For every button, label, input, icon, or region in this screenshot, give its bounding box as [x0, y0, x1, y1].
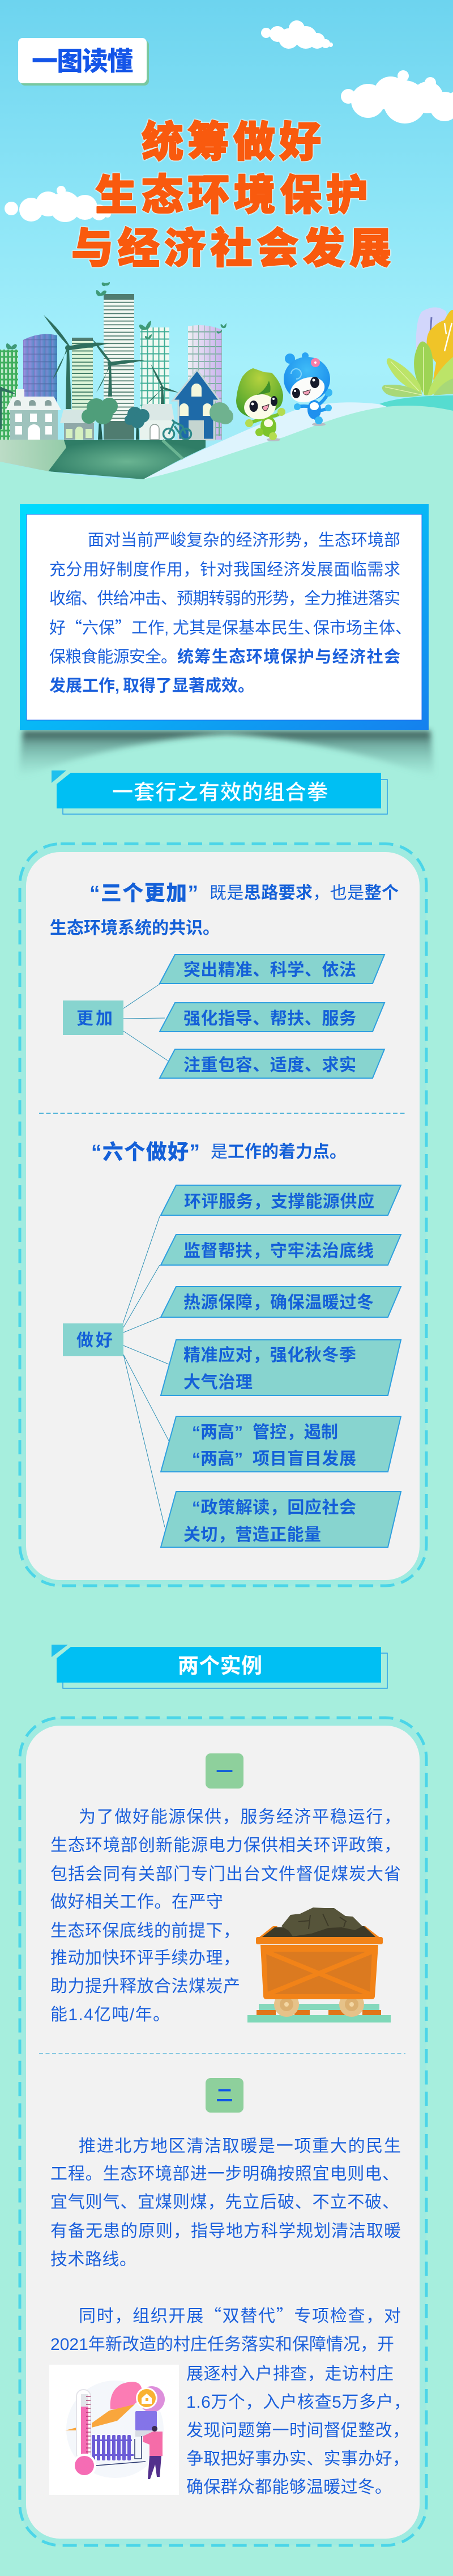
intro text — [49, 531, 412, 695]
intro text: 发展工作, — [49, 676, 119, 695]
intro text: 好“六保”工作, — [49, 615, 169, 638]
example two text: 展逐村入户排查，走访村庄 — [186, 2365, 394, 2383]
diagram: 做好: “两高” — [192, 1423, 243, 1442]
example one text: 生态环境部创新能源电力保供相关环评政策， — [50, 1836, 401, 1855]
六个做好 intro: 是工作的着力点。 — [211, 1143, 347, 1161]
diagram: 做好: 大气治理 — [183, 1373, 253, 1392]
diagram: 做好: 热源保障，确保温暖过冬 — [183, 1293, 374, 1312]
example two text: 争取把好事办实、实事办好， — [186, 2450, 409, 2468]
cloud: top right — [341, 70, 453, 124]
example two text: 确保群众都能够温暖过冬。 — [186, 2478, 392, 2497]
example one text — [50, 1808, 401, 2024]
diagram: 更加: 注重包容、适度、求实 — [183, 1056, 356, 1075]
butterflies — [6, 282, 226, 349]
example one text: 生态环保底线的前提下， — [50, 1922, 240, 1940]
intro text: 面对当前严峻复杂的经济形势，生态环境部 — [88, 531, 400, 550]
diagram: 做好 — [63, 1185, 401, 1547]
tag: 一 — [206, 1753, 243, 1789]
badge: 一图读懂: 一图读懂 — [32, 46, 133, 76]
cloud: top centre — [261, 20, 333, 49]
diagram: 做好: 关切，营造正能量 — [183, 1526, 321, 1544]
diagram: 更加: 突出精准、科学、依法 — [183, 961, 356, 980]
heading: 两个实例 — [52, 1645, 387, 1688]
example one text: 能1.4亿吨/年。 — [50, 2006, 170, 2024]
diagram: 做好: 管控，遏制 — [253, 1423, 338, 1442]
icon: heating and thermometer — [49, 2365, 179, 2495]
icon: coal mine cart — [247, 1907, 391, 2023]
diagram: 做好: 精准应对，强化秋冬季 — [183, 1346, 356, 1365]
diagram: 更加: 强化指导、帮扶、服务 — [183, 1010, 356, 1028]
heading: 一套行之有效的组合拳 — [52, 770, 387, 814]
六个做好 intro — [91, 1140, 347, 1164]
example two text: 有备无患的原则，指导地方科学规划清洁取暖 — [50, 2222, 401, 2241]
example one text: 推动加快环评手续办理， — [50, 1949, 240, 1968]
title: 与经济社会发展 — [71, 225, 391, 272]
example two text: 同时，组织开展“双替代”专项检查，对 — [79, 2302, 401, 2327]
intro text: 取得了显著成效。 — [123, 676, 254, 695]
panel: examples — [20, 1718, 426, 2545]
diagram: 做好: 做好 — [76, 1331, 113, 1350]
heading: 一套行之有效的组合拳: 一套行之有效的组合拳 — [112, 781, 328, 804]
tag: 二 — [206, 2078, 243, 2113]
diagram: 做好: 环评服务，支撑能源供应 — [184, 1193, 374, 1211]
intro text: 收缩、供给冲击、预期转弱的形势，全力推进落实 — [49, 589, 400, 608]
ground and hills — [0, 395, 453, 487]
mascot: green — [236, 368, 285, 441]
diagram: 做好: 项目盲目发展 — [253, 1450, 356, 1468]
三个更加 intro — [50, 882, 399, 938]
panel: intro — [18, 504, 435, 779]
houses — [6, 370, 220, 440]
diagram: 更加: 更加 — [76, 1010, 113, 1028]
intro text: 保粮食能源安全。 — [49, 648, 177, 666]
diagram: 做好: “政策解读，回应社会 — [192, 1498, 356, 1517]
三个更加 intro: 既是思路要求，也是整个 — [210, 884, 399, 902]
mascot: blue — [284, 352, 332, 426]
trees — [82, 398, 233, 440]
example one text: 做好相关工作。在严守 — [50, 1893, 223, 1911]
diagram: 做好: 监督帮扶，守牢法治底线 — [183, 1242, 374, 1261]
intro text: 保市场主体、 — [313, 619, 412, 637]
hero illustration — [0, 0, 453, 487]
三个更加 intro: 生态环境系统的共识。 — [50, 919, 220, 938]
title — [71, 118, 391, 272]
bicycle — [163, 420, 191, 440]
city: buildings — [0, 294, 222, 440]
example two text: 1.6万个，入户核查5万多户， — [186, 2393, 411, 2412]
六个做好 intro: “六个做好” — [91, 1140, 200, 1164]
example two text: 宜气则气、宜煤则煤，先立后破、不立不破、 — [50, 2193, 399, 2212]
diagram: 更加 — [63, 955, 384, 1078]
三个更加 intro: “三个更加” — [89, 882, 198, 905]
example two text: 技术路线。 — [50, 2250, 136, 2269]
example two text: 2021年新改造的村庄任务落实和保障情况，开 — [50, 2335, 394, 2354]
tag: 一: 一 — [216, 1763, 233, 1782]
example one text: 为了做好能源保供，服务经济平稳运行， — [79, 1808, 401, 1826]
diagram: 做好: “两高” — [192, 1450, 243, 1468]
panel: combination — [20, 844, 426, 1586]
intro text: 充分用好制度作用，针对我国经济发展面临需求 — [49, 560, 400, 579]
heading: 两个实例: 两个实例 — [178, 1654, 262, 1677]
cloud: left — [5, 186, 111, 222]
badge: 一图读懂 — [18, 38, 149, 86]
example one text: 包括会同有关部门专门出台文件督促煤炭大省 — [50, 1865, 401, 1884]
example two text — [50, 2137, 411, 2497]
tag: 二: 二 — [216, 2087, 233, 2105]
intro text: 统筹生态环境保护与经济社会 — [177, 648, 400, 666]
intro text: 尤其是保基本民生、 — [173, 619, 320, 637]
example two text: 发现问题第一时间督促整改， — [186, 2421, 409, 2440]
example one text: 助力提升释放合法煤炭产 — [50, 1977, 240, 1996]
example two text: 推进北方地区清洁取暖是一项重大的民生 — [79, 2137, 401, 2156]
example two text: 工程。生态环境部进一步明确按照宜电则电、 — [50, 2165, 399, 2183]
plants — [382, 307, 453, 397]
title: 生态环境保护 — [95, 172, 368, 219]
wind turbines — [0, 315, 178, 429]
title: 统筹做好 — [142, 118, 321, 165]
